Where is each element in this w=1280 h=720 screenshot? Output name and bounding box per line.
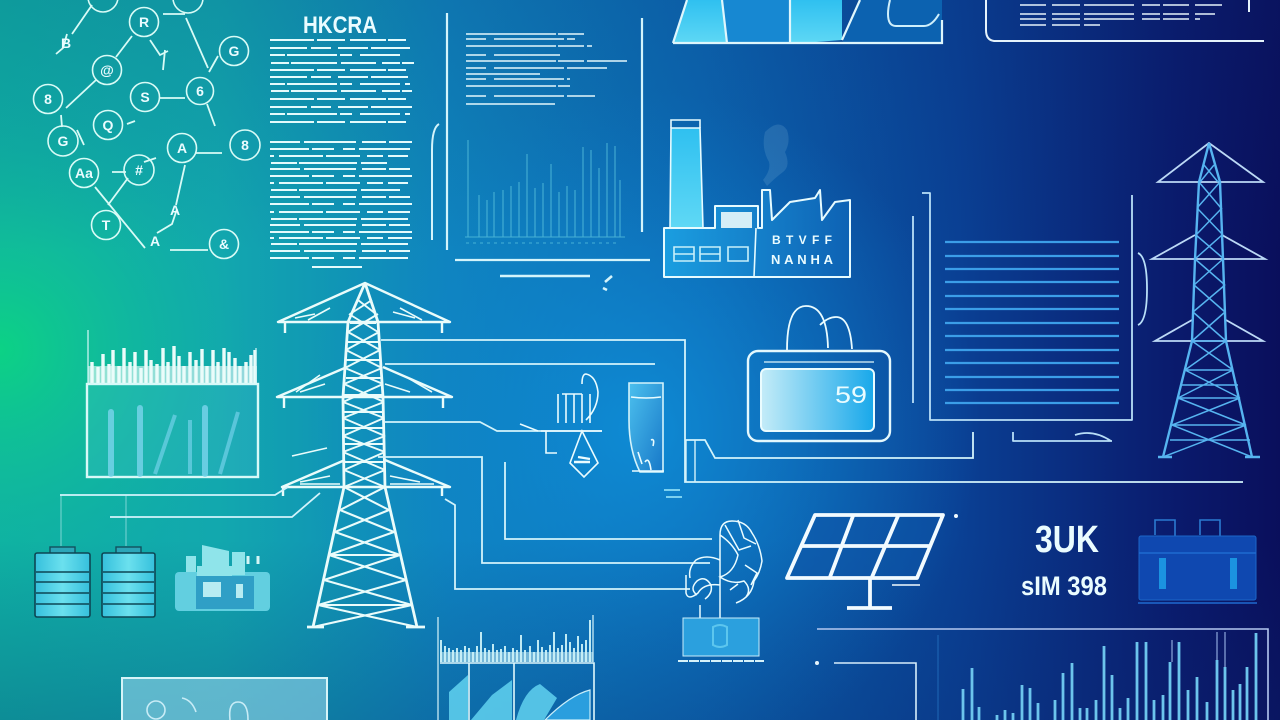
control display battery	[748, 306, 890, 441]
left transmission tower	[277, 283, 452, 627]
network diagram	[34, 0, 260, 258]
node glyphs: Q	[103, 117, 114, 133]
node glyphs: 8	[241, 137, 249, 153]
chart frame	[817, 629, 1268, 720]
document text block	[270, 12, 414, 267]
node glyphs: Aa	[75, 165, 93, 181]
battery pair	[35, 547, 155, 617]
value top: 3UK	[1035, 519, 1099, 561]
tower arms	[1152, 143, 1265, 341]
list rows	[945, 242, 1119, 403]
top right text panel	[986, 0, 1264, 41]
top panel with cyan blocks	[673, 0, 942, 44]
node glyphs	[44, 14, 249, 252]
tower body	[307, 283, 425, 627]
value bottom: sIM 398	[1021, 571, 1107, 601]
bottom left panel	[122, 678, 327, 720]
battery one	[35, 547, 90, 617]
factory smoke	[763, 124, 789, 186]
node glyphs: &	[219, 236, 229, 252]
report frame	[432, 13, 650, 290]
node glyphs: A	[177, 140, 187, 156]
water tank	[629, 383, 695, 497]
tower lattice	[1163, 165, 1252, 457]
node glyphs: #	[135, 162, 143, 178]
node glyphs: 6	[196, 83, 204, 99]
node glyphs: S	[140, 89, 150, 105]
screen reading: 59	[835, 382, 867, 409]
spike strip	[440, 652, 593, 662]
chimney	[670, 128, 703, 228]
tangled plant icon	[678, 520, 764, 661]
left chart panel	[87, 330, 258, 477]
report text lines	[466, 34, 627, 104]
node glyphs: 8	[44, 91, 52, 107]
chart bars	[111, 408, 205, 474]
node glyphs: @	[100, 62, 114, 78]
factory icon	[664, 120, 850, 277]
value labels	[1021, 519, 1107, 601]
panel frame	[913, 193, 1147, 441]
node glyphs: A	[150, 233, 160, 249]
chart frame	[87, 384, 258, 477]
battery screen	[761, 369, 874, 431]
lower lattice	[313, 487, 417, 627]
battery casing	[748, 351, 890, 441]
node glyphs: B	[61, 35, 71, 51]
spike strip	[88, 366, 257, 383]
node glyphs: G	[58, 133, 69, 149]
node glyphs: T	[102, 217, 111, 233]
chart bars	[963, 633, 1256, 720]
battery two	[102, 547, 155, 617]
upper lattice	[343, 300, 385, 487]
solar panel	[787, 515, 957, 608]
battery terminals	[787, 306, 852, 350]
node glyphs: G	[229, 43, 240, 59]
factory label: BTVFF	[772, 233, 832, 247]
dark battery icon	[1138, 520, 1257, 603]
tower body	[1158, 143, 1260, 457]
node glyphs: R	[139, 14, 149, 30]
frame lines	[447, 13, 650, 260]
valve diagram	[520, 374, 602, 477]
network connections	[56, 5, 222, 250]
right transmission tower	[1152, 143, 1265, 457]
icon base box	[683, 618, 759, 656]
report bar chart	[465, 140, 625, 243]
factory icon: NANHA	[771, 252, 834, 267]
chart panel	[440, 663, 594, 720]
bottom middle chart	[438, 615, 594, 720]
line list panel	[913, 193, 1147, 441]
factory building	[664, 190, 850, 277]
document heading: HKCRA	[303, 12, 377, 39]
equipment icon	[175, 545, 270, 611]
bottom right chart	[815, 629, 1268, 720]
tower arms	[277, 283, 452, 496]
network node circles	[34, 0, 260, 258]
connector lines	[60, 340, 1243, 589]
node glyphs: A	[170, 202, 180, 218]
